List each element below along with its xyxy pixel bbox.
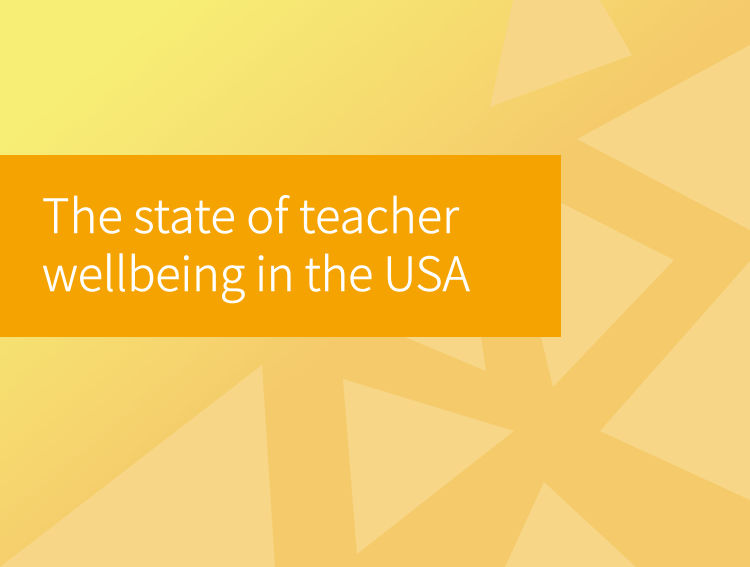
triangle: lower right bbox=[600, 261, 750, 500]
title banner bbox=[0, 155, 561, 337]
banner background bbox=[0, 155, 561, 337]
triangle: large lower left bbox=[0, 365, 275, 567]
title text: The state of teacher bbox=[42, 178, 459, 247]
title text: wellbeing in the USA bbox=[42, 236, 470, 305]
triangle: top bbox=[490, 0, 632, 107]
triangle: upper right bbox=[577, 45, 750, 230]
triangle: bottom bbox=[505, 482, 636, 567]
triangle: small under banner bbox=[405, 337, 486, 371]
triangle: lower centre bbox=[343, 379, 514, 554]
triangle: centre right bbox=[520, 182, 674, 387]
